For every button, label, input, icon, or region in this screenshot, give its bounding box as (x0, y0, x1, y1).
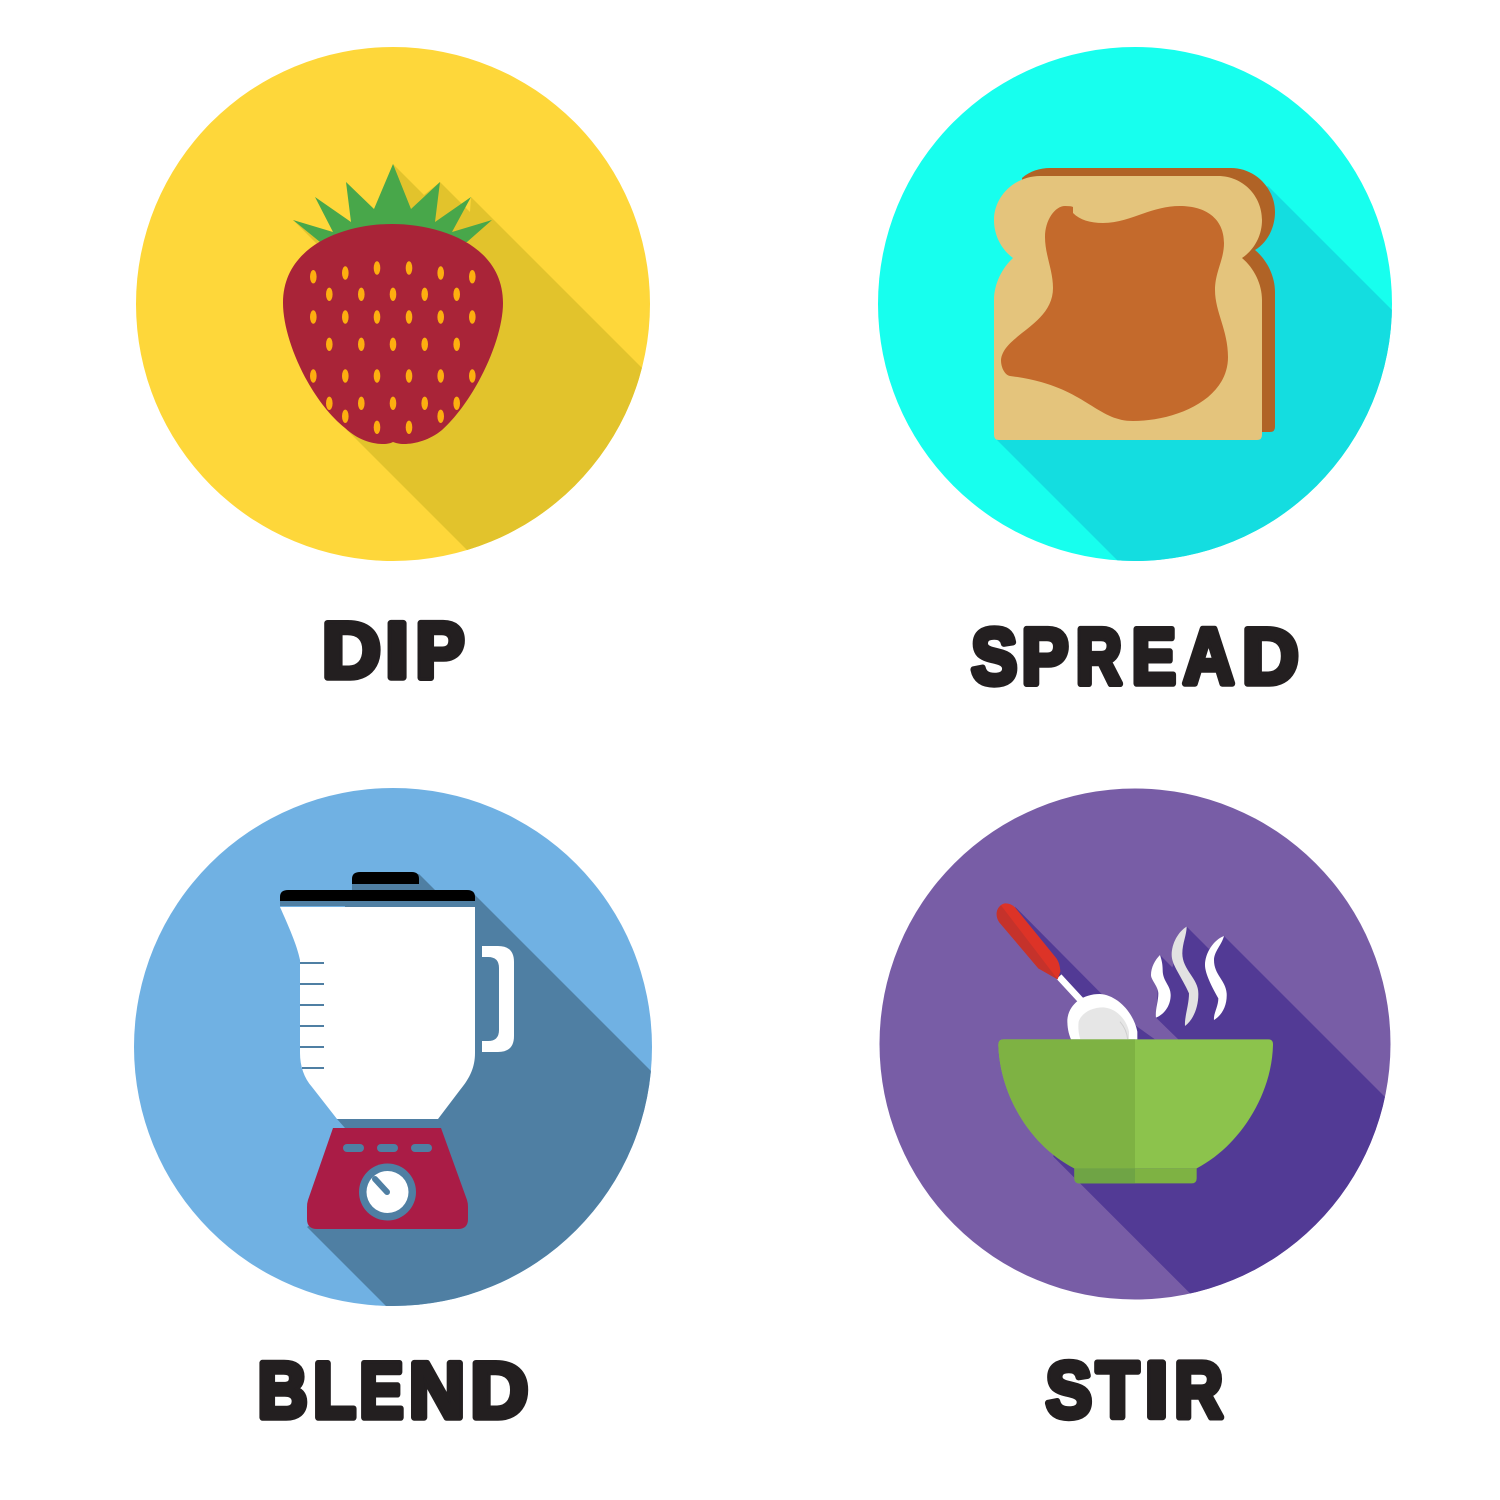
heading: STIR: S (1046, 1345, 1092, 1434)
blender base (307, 1128, 468, 1229)
heading: SPREAD: A (1183, 612, 1234, 700)
long shadow: blender (280, 874, 660, 1313)
toast bread slice (994, 176, 1262, 440)
heading: SPREAD: D (1242, 612, 1299, 700)
heading: BLEND: E (359, 1346, 404, 1435)
heading: STIR: R (1174, 1345, 1223, 1434)
heading: SPREAD: R (1076, 612, 1122, 700)
panel: blend (134, 788, 660, 1435)
strawberry body (283, 224, 503, 444)
spoon bowl (1067, 994, 1137, 1039)
spoon bowl highlight (1120, 1022, 1128, 1039)
spoon handle (997, 903, 1060, 979)
steam: middle (1172, 927, 1198, 1026)
long shadow: toast (997, 186, 1400, 573)
heading: SPREAD: S (971, 612, 1017, 700)
bowl foot left (1074, 1168, 1135, 1183)
panel: stir (880, 788, 1395, 1434)
bowl foot right (1074, 1168, 1197, 1183)
heading: BLEND: N (409, 1346, 465, 1435)
purple circle background (880, 788, 1390, 1300)
panel: spread (878, 47, 1400, 700)
strawberry leaves (293, 164, 492, 260)
icon: blender (280, 872, 514, 1229)
measuring marks (300, 963, 324, 1068)
blender jar (280, 907, 475, 1119)
icon: strawberry (283, 164, 503, 444)
heading: SPREAD: P (1022, 612, 1068, 700)
panel: dip (136, 47, 660, 695)
heading: BLEND: B (258, 1346, 308, 1435)
heading: SPREAD: E (1132, 612, 1176, 700)
steam: left (1151, 955, 1171, 1018)
blender handle (482, 946, 514, 1052)
heading: DIP: D (322, 606, 381, 695)
blender lid knob (352, 872, 419, 884)
heading: DIP: P (416, 606, 464, 695)
spoon stem (1059, 977, 1084, 1003)
heading: BLEND: L (313, 1346, 356, 1435)
heading: BLEND: D (470, 1346, 528, 1435)
heading: STIR: T (1096, 1345, 1139, 1434)
icon: toast (994, 168, 1275, 440)
cyan circle background (878, 47, 1392, 561)
spoon bowl inner (1078, 1007, 1129, 1039)
blender lid (280, 890, 475, 901)
base buttons (343, 1144, 432, 1152)
strawberry seeds (310, 261, 476, 434)
peanut butter spread (1001, 206, 1228, 421)
heading: DIP: I (385, 606, 409, 695)
icon: bowl and spoon with steam (997, 903, 1273, 1183)
blue circle background (134, 788, 652, 1306)
long shadow: strawberry (294, 164, 642, 550)
long shadow: bowl, spoon and steam (1015, 907, 1395, 1305)
steam: right (1205, 936, 1227, 1020)
base dial (359, 1164, 416, 1220)
spoon handle shade (997, 905, 1058, 979)
bowl right half (998, 1039, 1273, 1168)
heading: STIR: I (1145, 1345, 1168, 1434)
yellow circle background (136, 47, 650, 561)
toast back crust (1022, 168, 1275, 432)
bowl left half (998, 1039, 1135, 1168)
